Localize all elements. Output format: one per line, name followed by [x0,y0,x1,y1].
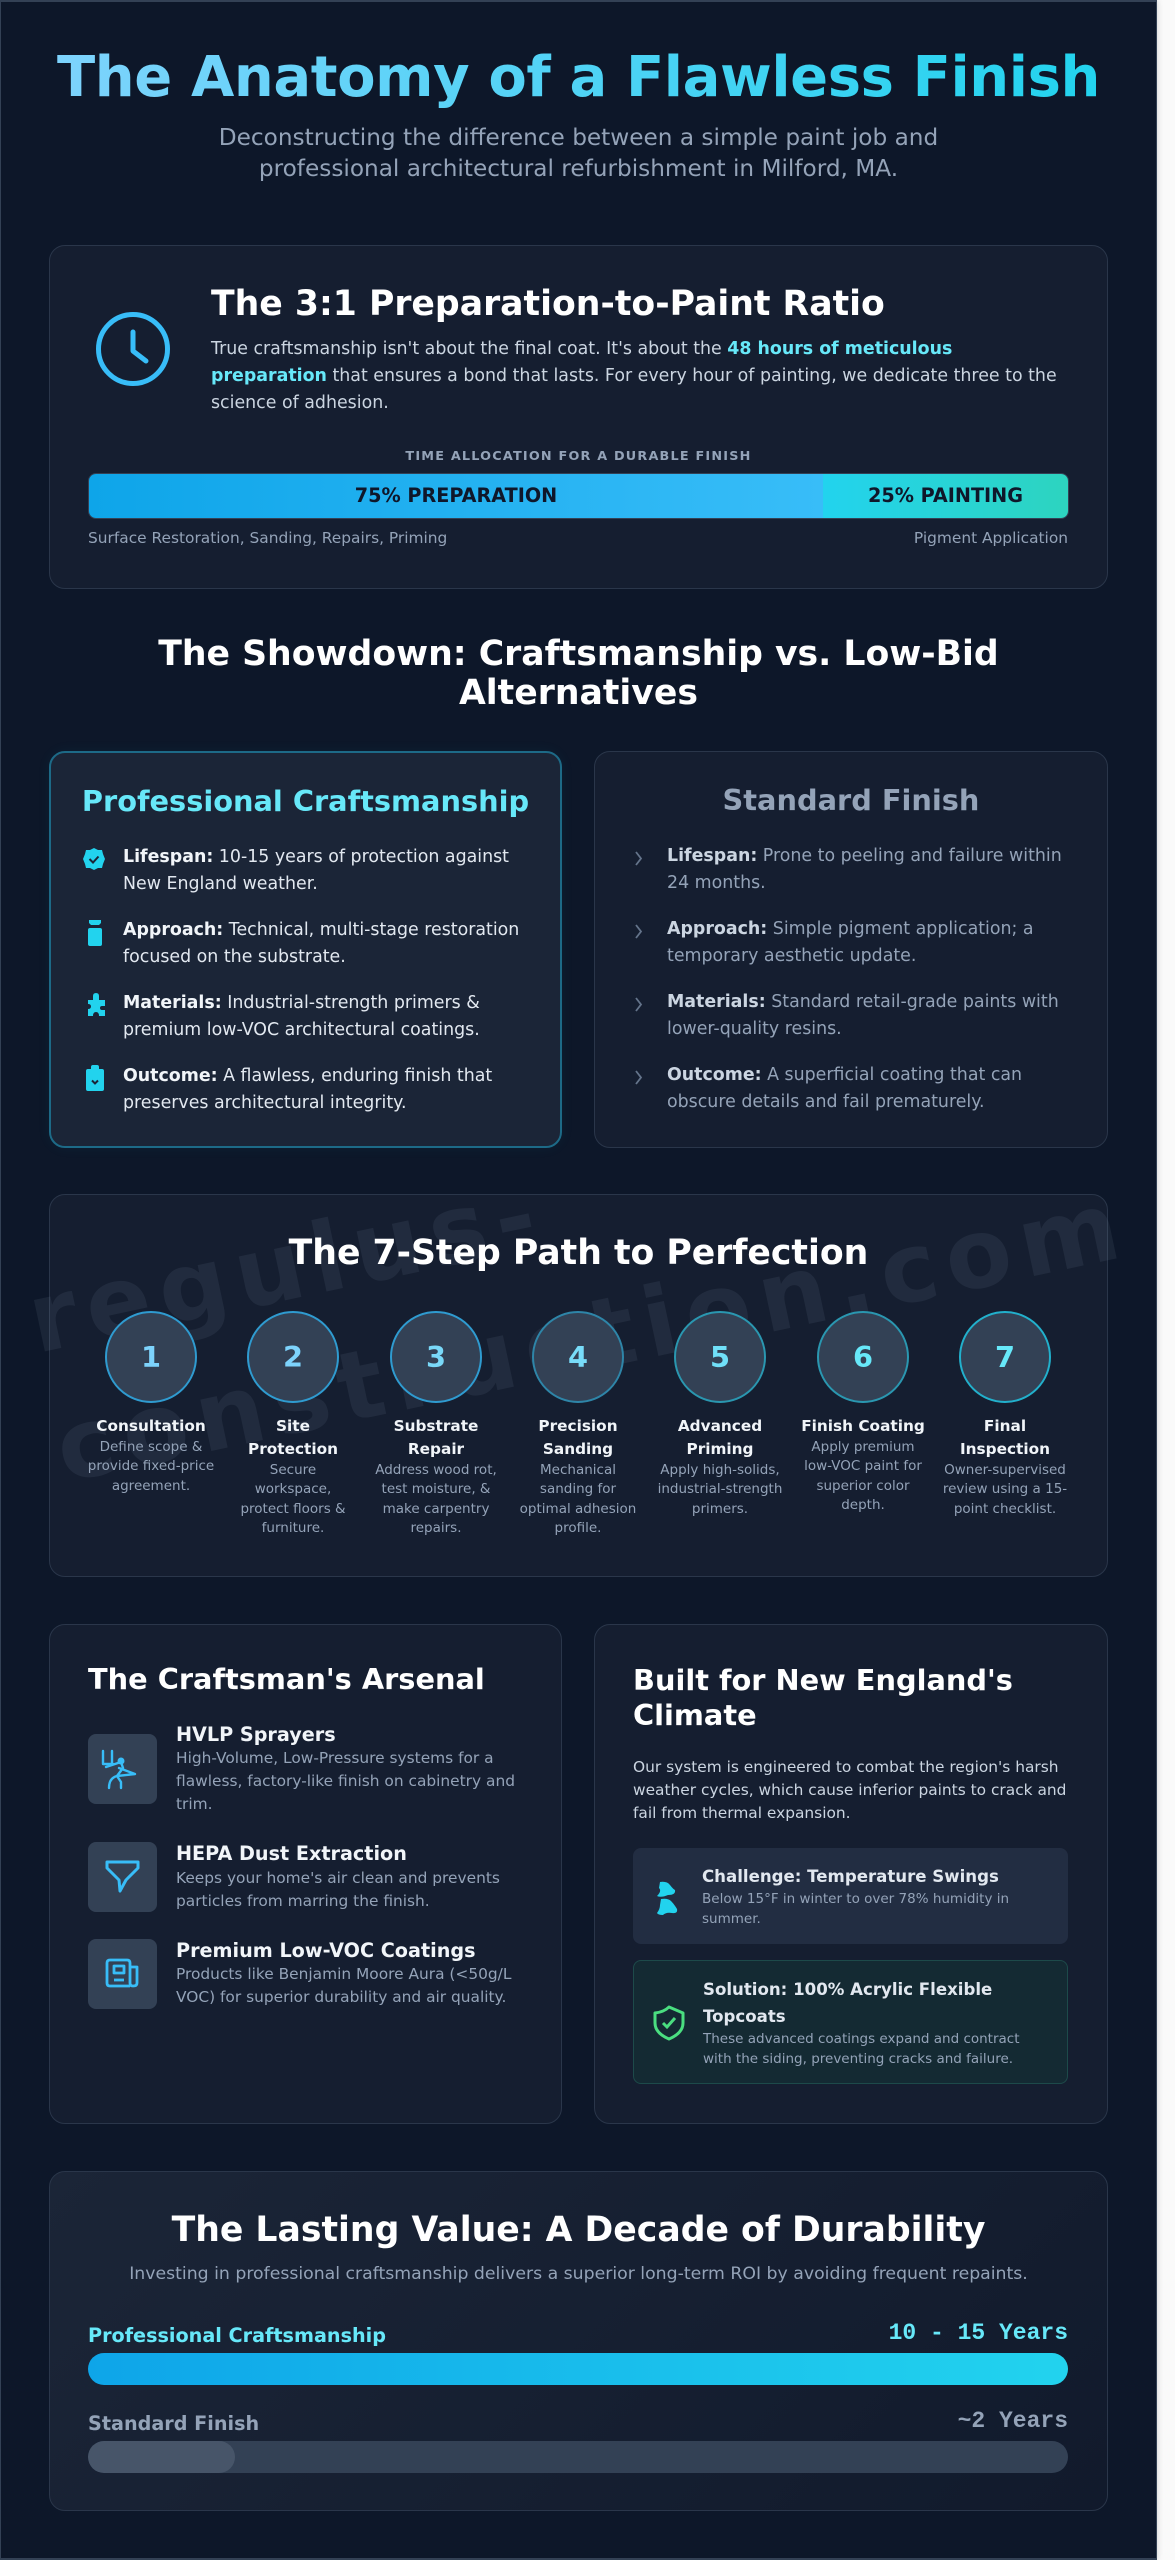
item: materials: Materials: Standard retail-grade paints with [667,992,1059,1012]
ratio description: preparation that ensures a bond that lasts. For every hour of painting, we dedicate three to the [211,366,1057,386]
step 1 number [105,1311,197,1403]
step 4 text: Sanding [543,1440,613,1458]
segment: preparation [89,474,823,518]
step 3 number: 3 [426,1340,446,1374]
step 4 text: profile. [555,1520,601,1536]
item: approach: focused on the substrate. [123,947,346,967]
item: lifespan: Lifespan: 10-15 years of protection against [123,846,509,866]
step 4 text: Precision [538,1417,618,1435]
step 7 number: 7 [995,1340,1015,1374]
item: lifespan: Lifespan: Prone to peeling and failure within [667,846,1062,866]
step 3 text: repairs. [410,1520,462,1536]
step 7 text: Final [984,1417,1026,1435]
callout: solution [633,1960,1068,2084]
step 5 text: Priming [686,1440,754,1458]
solution title: Solution: 100% Acrylic Flexible [703,1980,992,1999]
icon: puzzle piece [88,993,105,1016]
step 6 number: 6 [853,1340,873,1374]
heading: showdown: The Showdown: Craftsmanship vs. Low-Bid [158,634,999,674]
step 6 text: depth. [841,1497,885,1513]
item: approach [667,918,1034,966]
challenge title: Challenge: Temperature Swings [702,1867,999,1886]
step 5 text [658,1417,782,1517]
icon: jar [88,920,102,946]
panel: 7-step path [49,1194,1108,1577]
icon: shield check [654,2006,684,2040]
item: outcome: Outcome: A flawless, enduring finish that [123,1066,492,1086]
tool: coatings: Premium Low-VOC Coatings [176,1939,476,1962]
step 7 text: Inspection [960,1440,1050,1458]
step 7 text: review using a 15- [943,1481,1067,1497]
tool description [176,1869,500,1910]
heading: climate: Built for New England's [633,1663,1013,1697]
step 4 number: 4 [568,1340,588,1374]
step 4 text: sanding for [540,1481,616,1497]
tool description: particles from marring the finish. [176,1892,430,1910]
step 2 text: furniture. [262,1520,324,1536]
callout: challenge [633,1848,1068,1944]
subtitle [219,124,938,182]
heading: showdown [158,634,999,713]
subheading: Investing in professional craftsmanship delivers a superior long-term ROI by avoiding frequent repaints. [129,2264,1028,2284]
item: approach: temporary aesthetic update. [667,946,916,966]
step 3 text [375,1417,497,1536]
item: outcome: preserves architectural integrity. [123,1093,406,1113]
climate description: fail from thermal expansion. [633,1804,851,1822]
value: professional: 10 - 15 Years [889,2320,1068,2346]
value: standard: ~2 Years [958,2408,1068,2434]
bar caption: TIME ALLOCATION FOR A DURABLE FINISH [405,449,752,464]
step 2 text: Secure [270,1462,316,1478]
item: lifespan [123,846,509,894]
step 5 text: primers. [692,1501,748,1517]
item: materials: Materials: Industrial-strength primers & [123,992,480,1012]
climate description: weather cycles, which cause inferior paints to crack and [633,1780,1066,1798]
icon: clipboard check [86,1065,104,1091]
tool description: flawless, factory-like finish on cabinetry and [176,1772,515,1790]
heading: lasting value: The Lasting Value: A Decade of Durability [172,2210,985,2250]
tool description: Keeps your home's air clean and prevents [176,1869,500,1887]
step 5 number [674,1311,766,1403]
step 3 text: Substrate [394,1417,478,1435]
step 4 text: Mechanical [540,1462,616,1478]
heading: arsenal: The Craftsman's Arsenal [88,1662,485,1696]
step 6 number [817,1311,909,1403]
segment: preparation: 75% PREPARATION [355,484,557,507]
bar fill: standard [88,2441,235,2473]
tool: hvlp: HVLP Sprayers [176,1723,336,1746]
step 1 text [88,1417,214,1494]
panel: craftsman's arsenal [49,1624,562,2124]
step 2 number: 2 [283,1340,303,1374]
watermark: regulus- [18,1157,555,1375]
item: lifespan: 24 months. [667,873,766,893]
step 6 text [801,1417,925,1513]
step 2 text: Site [276,1417,310,1435]
segment: painting: 25% PAINTING [868,484,1023,507]
step 5 text: industrial-strength [658,1481,782,1497]
title: The Anatomy of a Flawless Finish [57,45,1100,110]
step 6 text: low-VOC paint for [804,1458,922,1474]
heading: climate: Climate [633,1698,757,1732]
step 6 text: Finish Coating [801,1417,925,1435]
ratio description [210,338,1057,412]
ratio description: science of adhesion. [211,392,389,412]
stacked time bar [88,473,1069,519]
step 4 number [532,1311,624,1403]
step 2 text: Protection [248,1440,338,1458]
panel: lasting value [49,2171,1108,2511]
step 7 text: point checklist. [954,1501,1056,1517]
step 1 text: provide fixed-price [88,1458,214,1474]
solution title [703,1980,992,2026]
step 3 text: test moisture, & [382,1481,490,1497]
challenge text: summer. [702,1910,761,1926]
item: outcome [667,1064,1022,1112]
panel: preparation ratio [49,245,1108,589]
step 7 text [943,1417,1067,1517]
item: approach: Approach: Simple pigment application; a [667,918,1034,938]
card heading: Standard Finish [723,783,979,817]
subtitle: professional architectural refurbishment in Milford, MA. [259,155,898,182]
heading: climate [633,1663,1013,1732]
step 6 text: Apply premium [811,1439,915,1455]
step 4 text: optimal adhesion [520,1501,636,1517]
step 1 number: 1 [141,1340,161,1374]
tool description [176,1965,512,2006]
item: approach: Approach: Technical, multi-stage restoration [123,920,519,940]
step 1 text: Consultation [96,1417,206,1435]
tool description: VOC) for superior durability and air quality. [176,1988,506,2006]
panel: new england climate [594,1624,1108,2124]
step 3 text: Repair [408,1440,464,1458]
icon: funnel [88,1842,157,1912]
solution text: with the siding, preventing cracks and failure. [703,2050,1013,2066]
subtitle: Deconstructing the difference between a simple paint job and [219,124,938,150]
step 6 text: superior color [816,1478,910,1494]
step 2 text: protect floors & [240,1501,346,1517]
bar: professional [88,2353,1068,2385]
watermark: construction.com [46,1168,1138,1505]
item: materials [667,992,1059,1039]
step 3 number [390,1311,482,1403]
step 1 text: agreement. [112,1478,190,1494]
tool: hepa: HEPA Dust Extraction [176,1842,407,1865]
item: materials: premium low-VOC architectural coatings. [123,1020,480,1040]
bar: standard [88,2441,1068,2473]
step 3 text: Address wood rot, [375,1462,497,1478]
challenge text [702,1891,1009,1926]
step 5 text: Advanced [678,1417,762,1435]
item: lifespan [667,846,1062,893]
item: materials [123,992,480,1040]
bar label right: Pigment Application [914,529,1068,547]
item: outcome: Outcome: A superficial coating that can [667,1064,1022,1084]
step 4 text [520,1417,636,1536]
item: outcome [123,1066,492,1113]
panel: standard finish [594,751,1108,1148]
step 2 text: workspace, [255,1481,331,1497]
step 7 number [959,1311,1051,1403]
step 5 number: 5 [710,1340,730,1374]
label: professional: Professional Craftsmanship [88,2324,386,2347]
step 5 text: Apply high-solids, [660,1462,780,1478]
challenge text: Below 15°F in winter to over 78% humidity in [702,1891,1009,1907]
step 1 text: Define scope & [100,1439,202,1455]
tool description: Products like Benjamin Moore Aura (<50g/L [176,1965,511,1983]
heading: showdown: Alternatives [459,673,698,713]
step 2 number [247,1311,339,1403]
item: materials: lower-quality resins. [667,1019,842,1039]
tool description: High-Volume, Low-Pressure systems for a [176,1749,494,1767]
tool description: trim. [176,1795,213,1813]
icon: chevrons [635,852,642,1084]
bar label left: Surface Restoration, Sanding, Repairs, Priming [88,529,447,547]
step 3 text: make carpentry [383,1501,489,1517]
step 2 text [240,1417,346,1536]
icon: newspaper can [88,1939,157,2009]
icon: badge check [83,848,105,870]
heading: ratio: The 3:1 Preparation-to-Paint Ratio [211,284,885,324]
icon: temperature blobs [657,1882,678,1915]
card heading: Professional Craftsmanship [82,784,529,818]
item: approach [123,920,519,967]
label: standard: Standard Finish [88,2412,259,2435]
solution text: These advanced coatings expand and contract [703,2031,1020,2047]
tool description [176,1749,515,1813]
segment: painting [823,474,1068,518]
item: outcome: obscure details and fail prematurely. [667,1092,985,1112]
climate description: Our system is engineered to combat the region's harsh [633,1758,1058,1776]
solution text [702,2031,1020,2066]
item: lifespan: New England weather. [123,874,318,894]
panel: professional craftsmanship [49,751,562,1148]
ratio description: True craftsmanship isn't about the final coat. It's about the 48 hours of meticulous [211,338,952,358]
heading: 7-step path: The 7-Step Path to Perfection [289,1233,868,1273]
step 7 text: Owner-supervised [944,1462,1066,1478]
icon: clock [96,312,170,386]
icon: hvlp sprayer [88,1734,157,1804]
climate description [633,1758,1066,1822]
solution title: Topcoats [703,2007,786,2026]
